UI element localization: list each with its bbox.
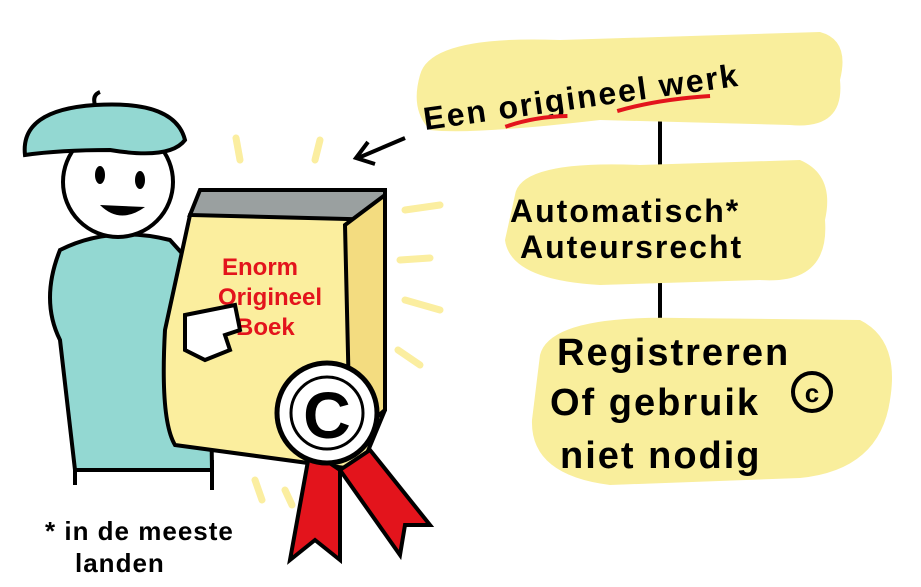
arrow (356, 138, 405, 164)
book title: Origineel (218, 284, 322, 311)
footnote: landen (75, 548, 165, 578)
box: registreren niet nodig: Of gebruik (550, 382, 760, 424)
beret (25, 104, 185, 155)
body (50, 234, 215, 470)
book title: Enorm (222, 254, 298, 281)
footnote: * in de meeste (45, 516, 234, 546)
book title: Boek (236, 314, 295, 341)
person (25, 92, 215, 490)
head (63, 127, 173, 237)
box: registreren niet nodig: Registreren (557, 332, 790, 374)
book (164, 190, 385, 470)
connectors (658, 110, 662, 325)
box: registreren niet nodig: c (805, 378, 819, 408)
box: automatisch auteursrecht (505, 160, 827, 285)
copyright badge: C (303, 378, 351, 452)
box: registreren niet nodig: niet nodig (560, 435, 762, 477)
hand (185, 305, 240, 360)
decorative glow strokes (236, 138, 440, 505)
copyright badge (277, 363, 430, 560)
box: origineel werk (417, 32, 842, 138)
box: automatisch auteursrecht: Auteursrecht (520, 229, 743, 265)
box: registreren niet nodig (532, 318, 892, 485)
box: origineel werk: Een origineel werk (421, 57, 742, 137)
box: automatisch auteursrecht: Automatisch* (510, 193, 740, 229)
